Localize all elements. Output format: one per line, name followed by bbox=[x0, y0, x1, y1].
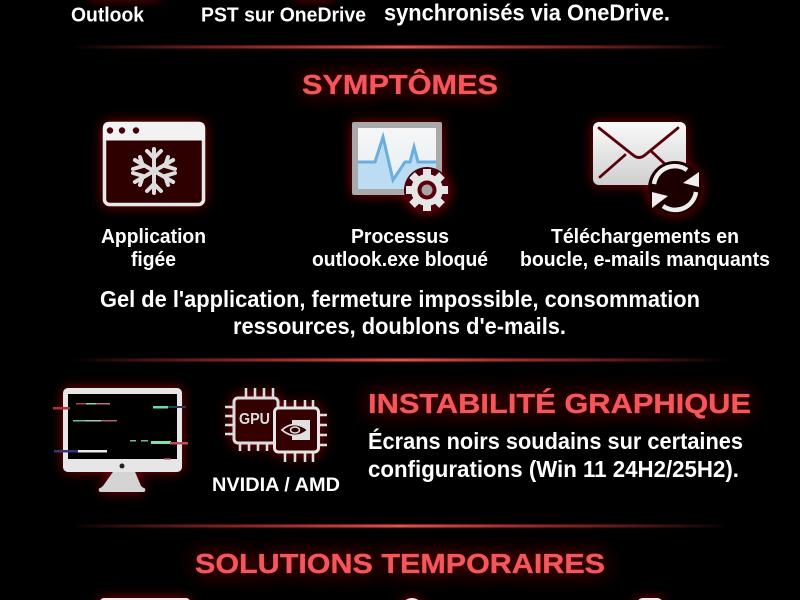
heading: symptômes: SYMPTÔMES bbox=[302, 68, 498, 100]
text: graphics description: Écrans noirs soudains sur certaines bbox=[368, 427, 743, 454]
heading: solutions temporaires: SOLUTIONS TEMPORAIRES bbox=[195, 548, 605, 579]
icon: frozen application window bbox=[103, 122, 205, 204]
label: processus bloqué: outlook.exe bloqué bbox=[312, 249, 488, 271]
label: téléchargements en boucle bbox=[520, 226, 770, 271]
label: application figée bbox=[101, 226, 206, 271]
label: processus bloqué bbox=[312, 226, 488, 271]
heading: instabilité graphique: INSTABILITÉ GRAPHIQUE bbox=[368, 388, 751, 419]
icons: solutions row, cropped at page bottom bbox=[100, 598, 663, 600]
icon: GPU chips: GPU bbox=[239, 411, 270, 428]
text: synchronised via OneDrive: synchronisés via OneDrive. bbox=[384, 0, 670, 26]
icon: GPU chips bbox=[225, 388, 327, 462]
label: application figée: Application bbox=[101, 226, 206, 248]
icon: process monitor with gear bbox=[352, 122, 450, 213]
red glow remnants from icons above the crop bbox=[90, 0, 335, 1]
text: symptom summary bbox=[100, 286, 700, 339]
label: téléchargements en boucle: Téléchargements en bbox=[551, 226, 739, 248]
icon: monitor with glitched screen bbox=[53, 388, 188, 492]
symptom labels bbox=[101, 226, 770, 271]
caption: PST sur OneDrive: PST sur OneDrive bbox=[201, 4, 366, 26]
caption: Outlook: Outlook bbox=[71, 4, 145, 26]
icon: envelope with sync arrows bbox=[593, 122, 702, 215]
text: symptom summary: Gel de l'application, fermeture impossible, consommation bbox=[100, 286, 700, 312]
label: téléchargements en boucle: boucle, e-mails manquants bbox=[520, 249, 770, 271]
text: graphics description bbox=[368, 427, 743, 482]
top row captions bbox=[71, 0, 670, 26]
label: application figée: figée bbox=[131, 249, 176, 271]
label: processus bloqué: Processus bbox=[351, 226, 449, 248]
text: graphics description: configurations (Win 11 24H2/25H2). bbox=[368, 456, 739, 482]
text: symptom summary: ressources, doublons d'e-mails. bbox=[233, 313, 566, 339]
label: NVIDIA / AMD: NVIDIA / AMD bbox=[212, 475, 340, 496]
